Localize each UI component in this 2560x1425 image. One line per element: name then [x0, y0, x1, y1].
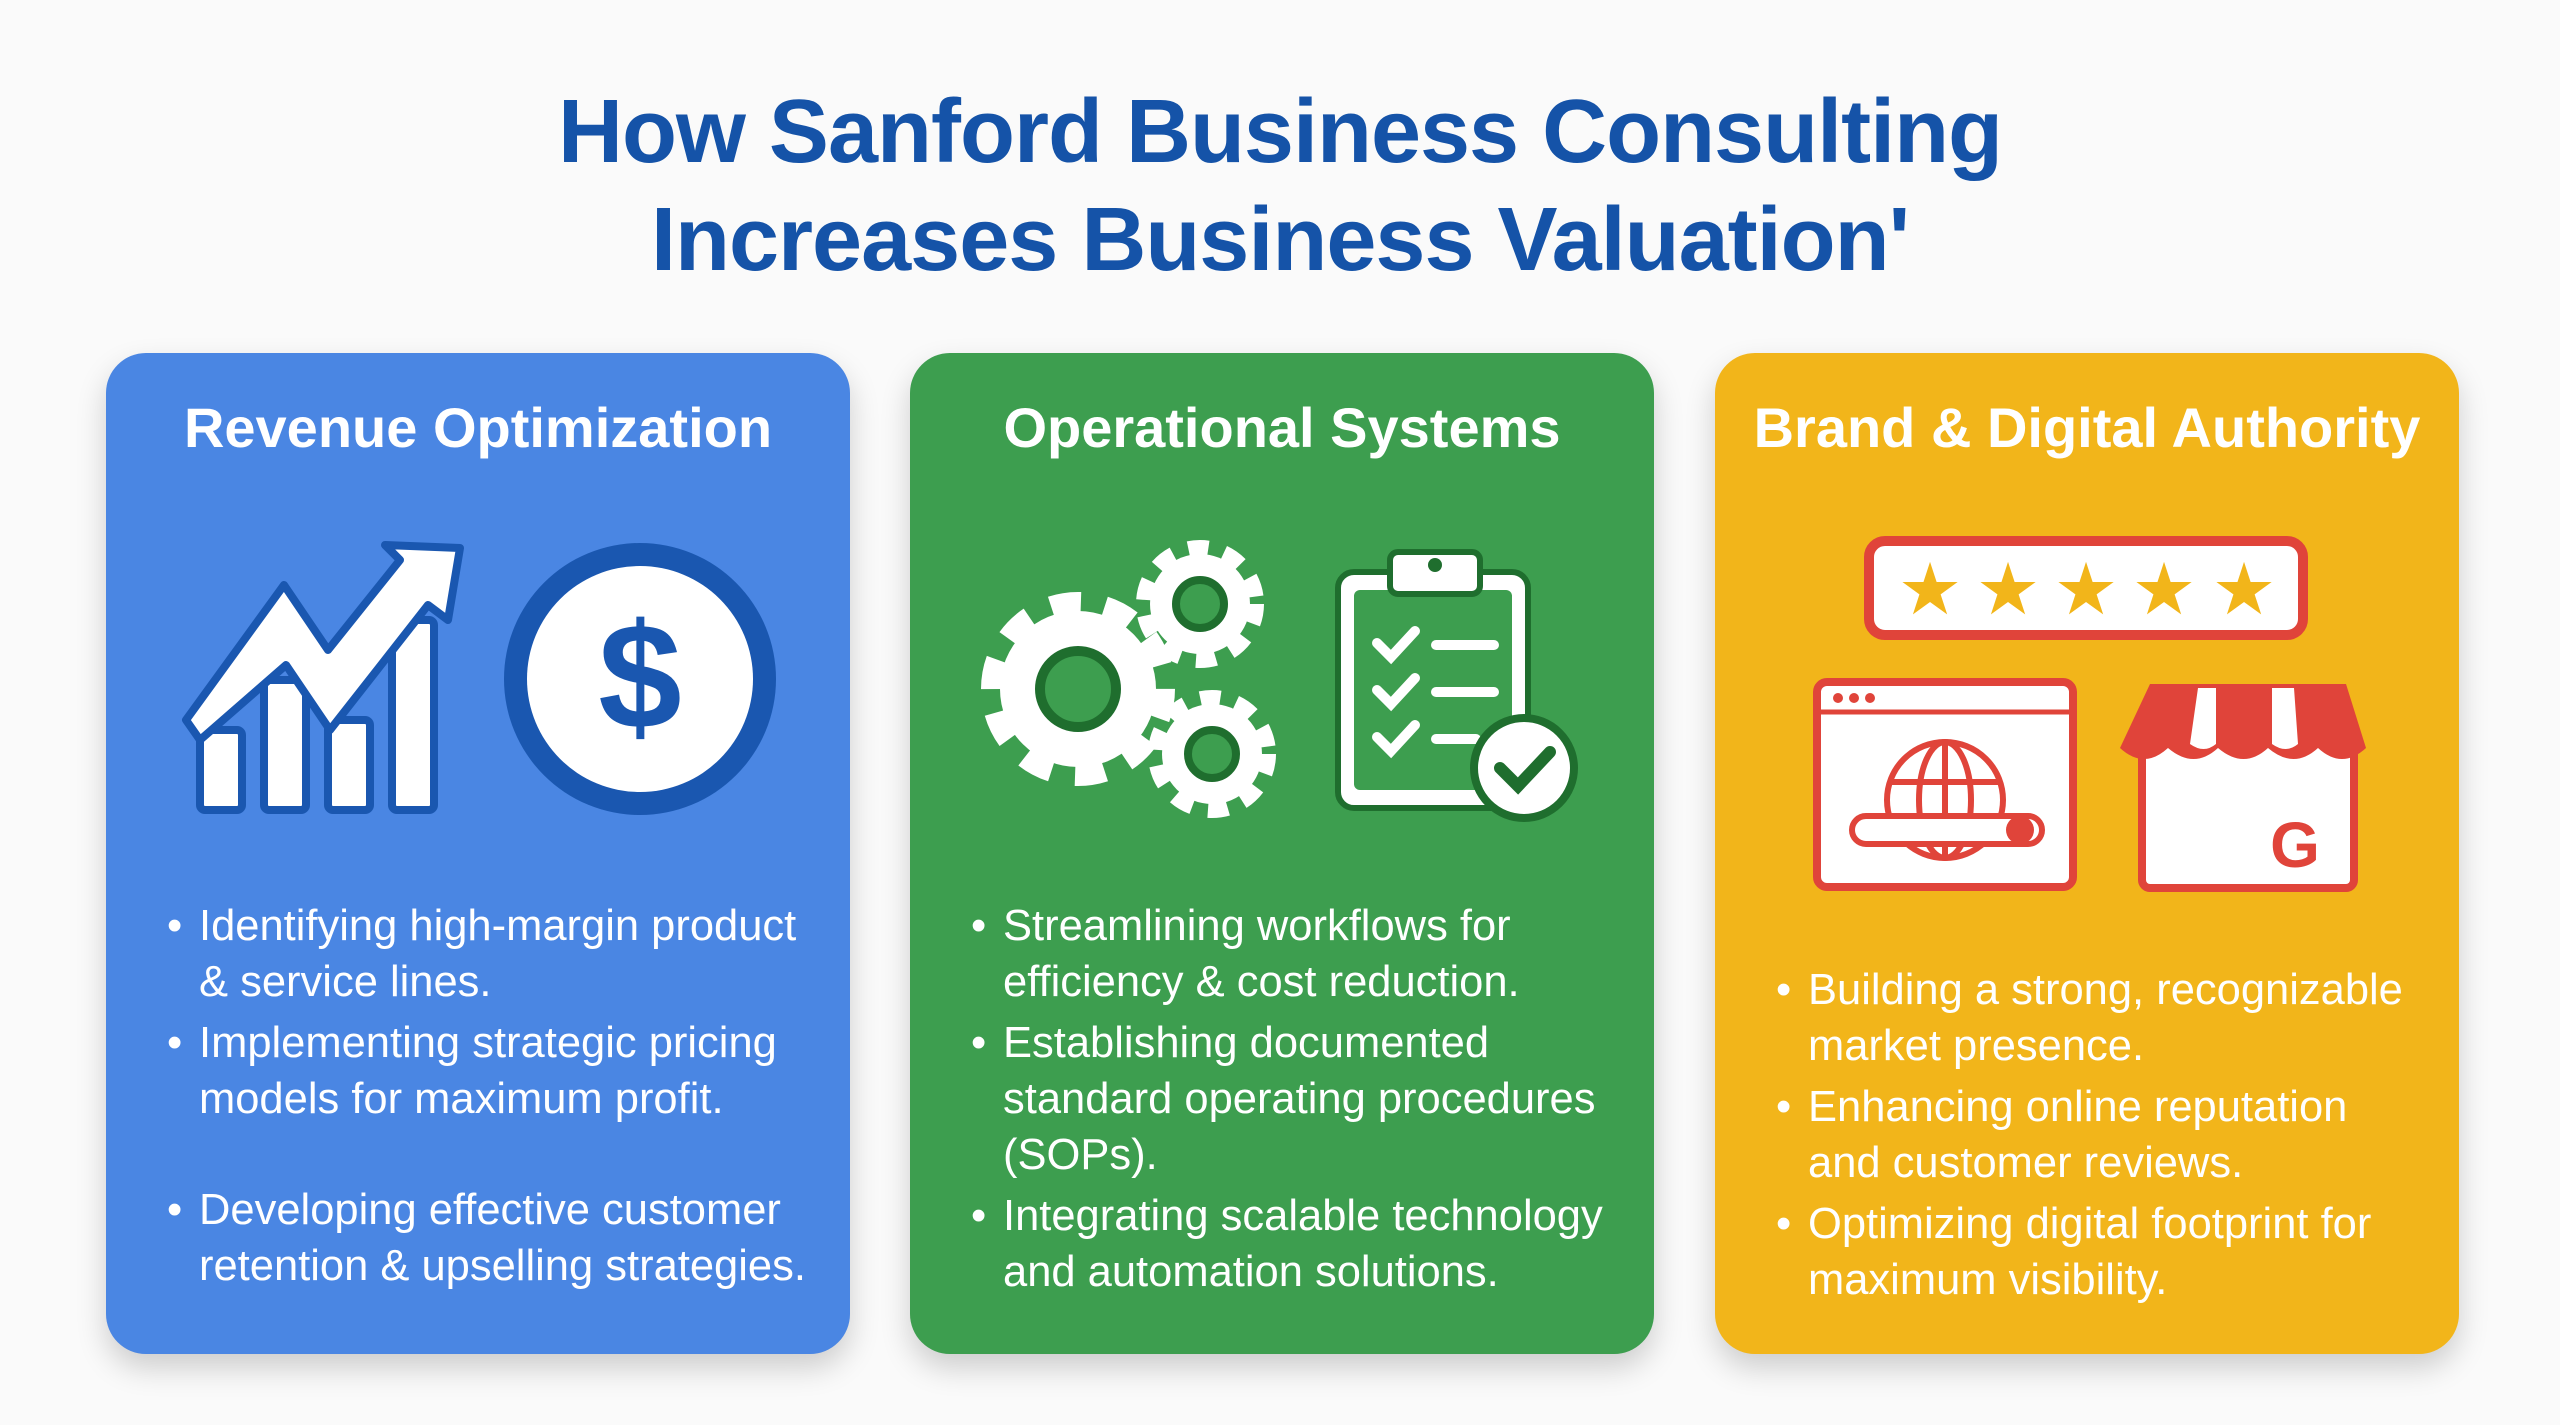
icon: google store: [2120, 684, 2366, 888]
panel: brand & digital authority: [1715, 353, 2459, 1354]
icon: star rating: ★: [2054, 547, 2118, 631]
icon: dollar coin: [504, 543, 776, 815]
bullets: operations: efficiency & cost reduction.: [1003, 958, 1520, 1006]
bullets: brand: and customer reviews.: [1808, 1139, 2243, 1187]
icon: dollar coin: $: [598, 592, 682, 760]
panel: revenue optimization: [106, 353, 850, 1354]
bullets: brand: market presence.: [1808, 1022, 2144, 1070]
bullets: operations: Establishing documented: [1003, 1019, 1489, 1067]
icon: star rating: ★: [2212, 547, 2276, 631]
bullets: operations: (SOPs).: [1003, 1131, 1158, 1179]
icon: growth chart: [186, 545, 460, 810]
bullets: revenue: [168, 902, 806, 1290]
bullets: revenue: retention & upselling strategies.: [199, 1242, 806, 1290]
title: Increases Business Valuation': [651, 190, 1909, 290]
title: How Sanford Business Consulting: [558, 82, 2002, 182]
bullets: revenue: Identifying high-margin product: [199, 902, 796, 950]
bullets: brand: Enhancing online reputation: [1808, 1083, 2347, 1131]
bullets: brand: [1778, 966, 2403, 1304]
icon: star rating: [1869, 541, 2303, 635]
icon: gears: [992, 548, 1268, 810]
panel: operational systems: [910, 353, 1654, 1354]
bullets: revenue: models for maximum profit.: [199, 1075, 724, 1123]
heading: brand & digital authority: Brand & Digital Authority: [1754, 396, 2420, 459]
bullets: brand: maximum visibility.: [1808, 1256, 2167, 1304]
bullets: operations: Streamlining workflows for: [1003, 902, 1511, 950]
bullets: operations: Integrating scalable technology: [1003, 1192, 1603, 1240]
bullets: brand: Optimizing digital footprint for: [1808, 1200, 2371, 1248]
heading: operational systems: Operational Systems: [1003, 396, 1561, 459]
icon: star rating: ★: [1976, 547, 2040, 631]
icon: star rating: ★: [2132, 547, 2196, 631]
icon: google store: G: [2270, 809, 2320, 881]
bullets: revenue: Implementing strategic pricing: [199, 1019, 777, 1067]
bullets: operations: [972, 902, 1603, 1296]
icon: clipboard with check: [1338, 552, 1574, 818]
bullets: revenue: & service lines.: [199, 958, 492, 1006]
icon: star rating: ★: [1898, 547, 1962, 631]
icon: browser globe: [1817, 682, 2073, 887]
title: [558, 82, 2002, 290]
bullets: revenue: Developing effective customer: [199, 1186, 781, 1234]
bullets: brand: Building a strong, recognizable: [1808, 966, 2403, 1014]
bullets: operations: and automation solutions.: [1003, 1248, 1499, 1296]
heading: revenue optimization: Revenue Optimization: [184, 396, 772, 459]
bullets: operations: standard operating procedures: [1003, 1075, 1595, 1123]
